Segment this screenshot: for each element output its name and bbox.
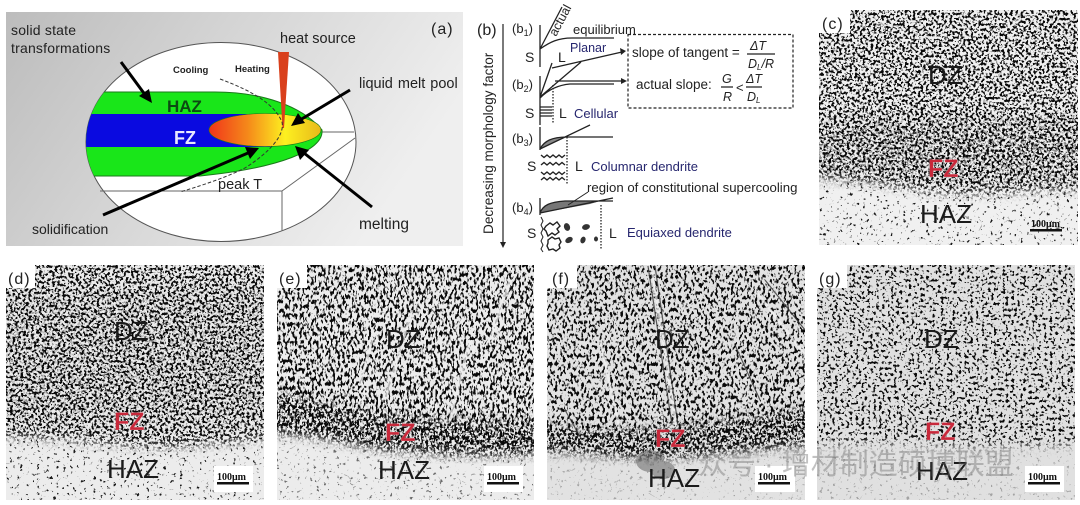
Planar label: Planar — [570, 41, 606, 55]
L label: L — [575, 158, 583, 174]
b1 tag: (b — [512, 21, 524, 36]
leader line — [568, 192, 588, 205]
b1 axes and curves — [540, 7, 614, 67]
micrograph (f) — [547, 265, 805, 500]
b4 tag: ) — [529, 200, 533, 215]
HAZ grain boundaries — [819, 170, 1078, 245]
label: HAZ: HAZ — [167, 97, 202, 116]
HAZ grain boundaries — [6, 425, 264, 500]
arrowhead — [291, 113, 305, 126]
label: transformations: transformations — [11, 40, 110, 56]
grain — [581, 223, 591, 231]
b1 tag: ) — [529, 21, 533, 36]
scale bar text: 100μm — [217, 472, 247, 483]
base tone — [547, 265, 805, 500]
bubble — [651, 461, 675, 479]
scale bar — [1028, 482, 1060, 484]
arrowhead — [245, 147, 259, 159]
scale bar — [758, 482, 790, 484]
label: solidification: solidification — [32, 221, 108, 237]
label (c): (c) — [822, 16, 844, 33]
cells — [540, 107, 552, 116]
HAZ: HAZ — [107, 454, 159, 484]
scale bar text: 100μm — [487, 472, 517, 483]
axis label: Decreasing morphology factor — [481, 52, 496, 234]
HAZ: HAZ — [378, 455, 430, 485]
long dendrite arms — [565, 266, 805, 440]
b4 tag: 4 — [524, 207, 529, 217]
sub-panel b1 — [512, 2, 636, 67]
DZ: DZ — [114, 316, 149, 346]
Cellular label: Cellular — [574, 106, 619, 121]
label: solid state transformations: solid state — [11, 22, 76, 38]
HAZ sparse texture — [547, 440, 805, 500]
label box — [819, 10, 850, 33]
b3 tag: 3 — [524, 138, 529, 148]
scale bar — [1030, 229, 1062, 232]
white streaks — [600, 270, 805, 430]
HAZ sparse texture — [819, 170, 1078, 245]
fraction bar — [747, 53, 775, 55]
sub-panel b3 — [512, 125, 698, 184]
label: heat source: heat source — [280, 31, 356, 47]
slope of tangent text: slope of tangent = — [632, 45, 740, 60]
DZ: DZ — [386, 324, 421, 354]
S label: S — [525, 49, 534, 65]
fraction bar — [721, 86, 762, 88]
panel (b): morphology schematic — [477, 2, 797, 252]
G over R: G — [722, 72, 732, 86]
L label: L — [559, 105, 567, 121]
FZ blue band — [80, 114, 270, 147]
less than sign: < — [736, 80, 744, 95]
fraction denominator: L — [757, 63, 761, 72]
b2 tag: 2 — [524, 84, 529, 94]
dark region — [6, 282, 264, 428]
scale box — [484, 466, 523, 492]
HAZ green zone — [80, 92, 322, 176]
FZ: FZ — [385, 419, 416, 447]
fraction numerator: ΔT — [749, 39, 767, 53]
scale box — [214, 466, 253, 492]
micrograph (e) — [277, 265, 534, 500]
scale bar text: 100μm — [1028, 472, 1058, 483]
dark band — [819, 110, 1078, 190]
arrowhead — [500, 242, 506, 248]
base tone — [819, 10, 1078, 245]
fraction denominator: /R — [760, 57, 774, 71]
micrograph (d) — [6, 265, 264, 500]
label box — [6, 265, 35, 288]
DZ: DZ — [924, 324, 959, 354]
watermark icon — [636, 450, 675, 479]
HAZ grain boundaries — [277, 425, 534, 500]
dotted boundary — [600, 205, 602, 250]
axis arrow — [502, 24, 504, 243]
watermark: 众号 · 增材制造硕博联盟 — [698, 448, 1014, 481]
Equiaxed dendrite label: Equiaxed dendrite — [627, 225, 732, 240]
DZ streaked texture — [277, 265, 534, 462]
dark band — [277, 385, 534, 464]
temperature dashed curve — [180, 79, 282, 192]
label: melting: melting — [359, 216, 409, 233]
base tone — [817, 265, 1075, 500]
actual label: actual — [546, 2, 574, 38]
HAZ sparse texture — [6, 425, 264, 500]
label box — [277, 265, 307, 288]
DZ dotted texture — [817, 265, 1075, 500]
label: (a): (a) — [431, 21, 454, 38]
arrow: solid state transformations — [121, 62, 146, 96]
b2 axes and curves — [540, 52, 623, 125]
region label: region of constitutional supercooling — [587, 180, 797, 195]
dendrite wall — [541, 217, 543, 252]
b3 tag: ) — [529, 131, 533, 146]
dotted boundary — [566, 137, 568, 184]
D L: L — [756, 96, 760, 105]
label box — [547, 265, 577, 288]
grain — [563, 222, 571, 232]
label: Heating: Heating — [235, 64, 270, 75]
scale bar text: 100μm — [758, 472, 788, 483]
arrow: liquid melt pool — [300, 90, 350, 120]
panel (a): welding schematic — [6, 12, 463, 246]
R: R — [723, 90, 732, 104]
S label: S — [525, 105, 534, 121]
heat source beam — [278, 52, 289, 128]
b1 tag: 1 — [524, 28, 529, 38]
DZ: DZ — [928, 60, 963, 90]
workpiece ellipse — [86, 42, 356, 242]
arrow: melting — [304, 153, 372, 207]
supercooled area — [540, 201, 600, 213]
S label: S — [527, 158, 536, 174]
label (e): (e) — [279, 271, 302, 288]
scale bar — [217, 482, 249, 484]
white streaks — [360, 280, 510, 420]
L label: L — [558, 49, 566, 65]
HAZ sparse texture — [817, 440, 1075, 500]
FZ: FZ — [114, 408, 145, 436]
arrowhead — [295, 146, 309, 160]
L label: L — [609, 225, 617, 241]
base tone — [277, 265, 534, 500]
dashed box — [628, 34, 793, 108]
b3 axes and curves — [540, 125, 613, 150]
actual slope text: actual slope: — [636, 77, 712, 92]
b2 tag: (b — [512, 77, 524, 92]
columnar dendrites — [541, 155, 565, 180]
label: Cooling: Cooling — [173, 65, 209, 76]
delta T: ΔT — [745, 72, 763, 86]
arrow: solidification — [103, 153, 248, 215]
equilibrium label: equilibrium — [573, 22, 636, 37]
sub-panel b4 — [512, 180, 797, 252]
micrograph (c) — [819, 10, 1078, 245]
scale box — [1025, 466, 1064, 492]
grain — [579, 236, 587, 244]
label (d): (d) — [8, 271, 31, 288]
micrograph (g) — [817, 265, 1075, 500]
DZ streaked texture — [547, 265, 805, 500]
equiaxed dendrites — [544, 222, 561, 251]
b4 tag: (b — [512, 200, 524, 215]
b4 axes and curves — [540, 198, 613, 215]
FZ: FZ — [928, 155, 959, 183]
callout: slope box — [628, 34, 793, 108]
label (f): (f) — [552, 271, 570, 288]
label: FZ: FZ — [174, 128, 196, 148]
HAZ: HAZ — [916, 456, 968, 486]
D L: D — [747, 90, 756, 104]
label: peak T: peak T — [218, 177, 262, 193]
HAZ sparse texture — [277, 425, 534, 500]
HAZ grain boundaries — [547, 440, 805, 500]
scale bar text: 100μm — [1031, 219, 1061, 230]
grain — [594, 236, 598, 242]
HAZ: HAZ — [648, 463, 700, 493]
label: liquid melt pool: liquid melt pool — [359, 76, 458, 92]
arrowheads to callout — [620, 48, 627, 84]
FZ: FZ — [655, 425, 686, 453]
base tone — [6, 265, 264, 500]
b3 tag: (b — [512, 131, 524, 146]
dotted boundary — [552, 85, 554, 123]
label (g): (g) — [819, 271, 842, 288]
sub-panel b2 — [512, 48, 627, 125]
bubble — [636, 450, 664, 472]
fraction denominator: D — [748, 57, 757, 71]
FZ: FZ — [925, 418, 956, 446]
DZ: DZ — [655, 324, 690, 354]
panel background — [6, 12, 463, 246]
dark band — [547, 265, 805, 500]
workpiece edges — [100, 132, 355, 231]
scale box — [755, 466, 795, 492]
HAZ: HAZ — [920, 199, 972, 229]
supercooled area — [540, 137, 567, 149]
arrowhead — [139, 89, 152, 103]
scale bar — [487, 482, 519, 484]
HAZ grain boundaries — [817, 440, 1075, 500]
DZ dendrite texture — [819, 10, 1078, 202]
S label: S — [527, 225, 536, 241]
Columnar dendrite label: Columnar dendrite — [591, 159, 698, 174]
melt pool — [209, 114, 321, 146]
DZ dendrite texture — [6, 265, 264, 456]
b2 tag: ) — [529, 77, 533, 92]
grain — [564, 236, 574, 244]
equiaxed grains — [563, 222, 598, 244]
label box — [817, 265, 847, 288]
label: (b): (b) — [477, 22, 497, 39]
